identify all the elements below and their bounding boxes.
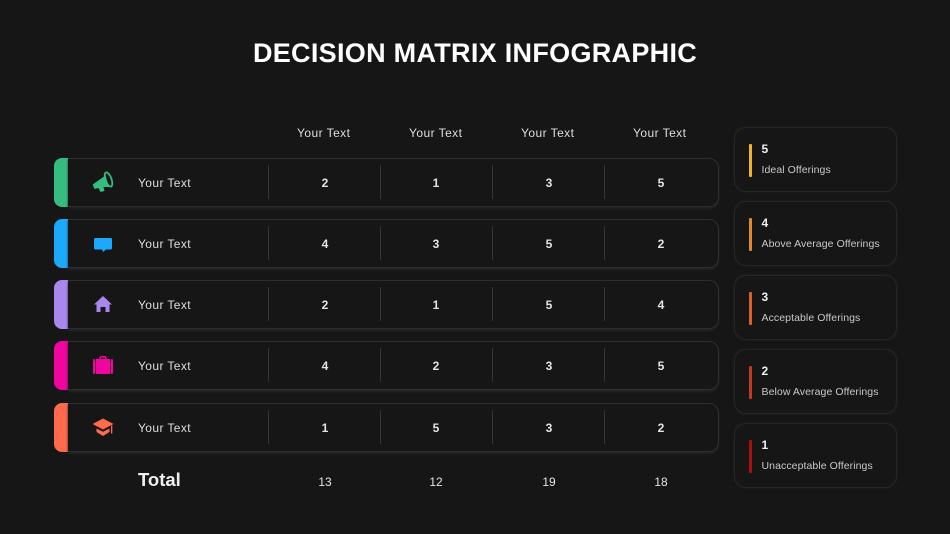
legend card: 2: Below Average Offerings xyxy=(762,386,879,398)
column headers: Your Text xyxy=(297,126,350,140)
row: business: 4 xyxy=(322,359,328,373)
row: marketing: 1 xyxy=(433,176,439,190)
row: housing: 5 xyxy=(546,298,552,312)
icon: house xyxy=(94,296,112,312)
row: communication: Your Text xyxy=(138,237,191,251)
row: education xyxy=(54,403,719,454)
row: marketing: Your Text xyxy=(138,176,191,190)
row: education: 1 xyxy=(322,421,328,435)
total row: 19 xyxy=(542,475,556,489)
row: communication: 4 xyxy=(322,237,328,251)
column headers xyxy=(297,126,686,140)
row: business: Your Text xyxy=(138,359,191,373)
legend card: 5 xyxy=(734,127,897,192)
row: business: 2 xyxy=(433,359,439,373)
legend card: 1 xyxy=(734,423,897,488)
row: business: 3 xyxy=(546,359,552,373)
total row: Total xyxy=(138,469,181,490)
row: marketing: 3 xyxy=(546,176,552,190)
legend card: 1: 1 xyxy=(762,438,768,452)
row: housing: 1 xyxy=(433,298,439,312)
row: communication: 3 xyxy=(433,237,439,251)
legend card: 3 xyxy=(734,275,897,340)
total row: 13 xyxy=(318,475,332,489)
icon: briefcase xyxy=(93,356,113,374)
row: housing: 2 xyxy=(322,298,328,312)
legend card: 5: Ideal Offerings xyxy=(762,164,831,176)
legend card: 4 xyxy=(734,201,897,266)
row: communication: 5 xyxy=(546,237,552,251)
legend card: 3: 3 xyxy=(762,290,768,304)
row: marketing: 2 xyxy=(322,176,328,190)
icon: megaphone xyxy=(92,172,114,192)
title: DECISION MATRIX INFOGRAPHIC xyxy=(253,38,697,68)
row: communication: 2 xyxy=(658,237,664,251)
icon: graduation cap xyxy=(92,418,114,436)
column headers: Your Text xyxy=(521,126,574,140)
column headers: Your Text xyxy=(633,126,686,140)
row: education: 3 xyxy=(546,421,552,435)
total row: 18 xyxy=(654,475,668,489)
row: education: Your Text xyxy=(138,421,191,435)
row: business: 5 xyxy=(658,359,664,373)
total row: 12 xyxy=(429,475,443,489)
row: education: 5 xyxy=(433,421,439,435)
row: housing: Your Text xyxy=(138,298,191,312)
legend card: 5: 5 xyxy=(762,142,768,156)
column headers: Your Text xyxy=(409,126,462,140)
icon: speech bubble xyxy=(94,238,112,252)
row: business xyxy=(54,341,719,392)
row: marketing xyxy=(54,158,719,208)
legend card: 4: Above Average Offerings xyxy=(762,238,880,250)
legend card: 2 xyxy=(734,349,897,414)
row: communication xyxy=(54,219,719,270)
legend card: 1: Unacceptable Offerings xyxy=(762,460,873,472)
legend card: 3: Acceptable Offerings xyxy=(762,312,860,324)
row: education: 2 xyxy=(658,421,664,435)
legend card: 2: 2 xyxy=(762,364,768,378)
row: housing: 4 xyxy=(658,298,664,312)
total row xyxy=(138,469,668,490)
row: marketing: 5 xyxy=(658,176,664,190)
row: housing xyxy=(54,280,719,330)
legend card: 4: 4 xyxy=(762,216,768,230)
